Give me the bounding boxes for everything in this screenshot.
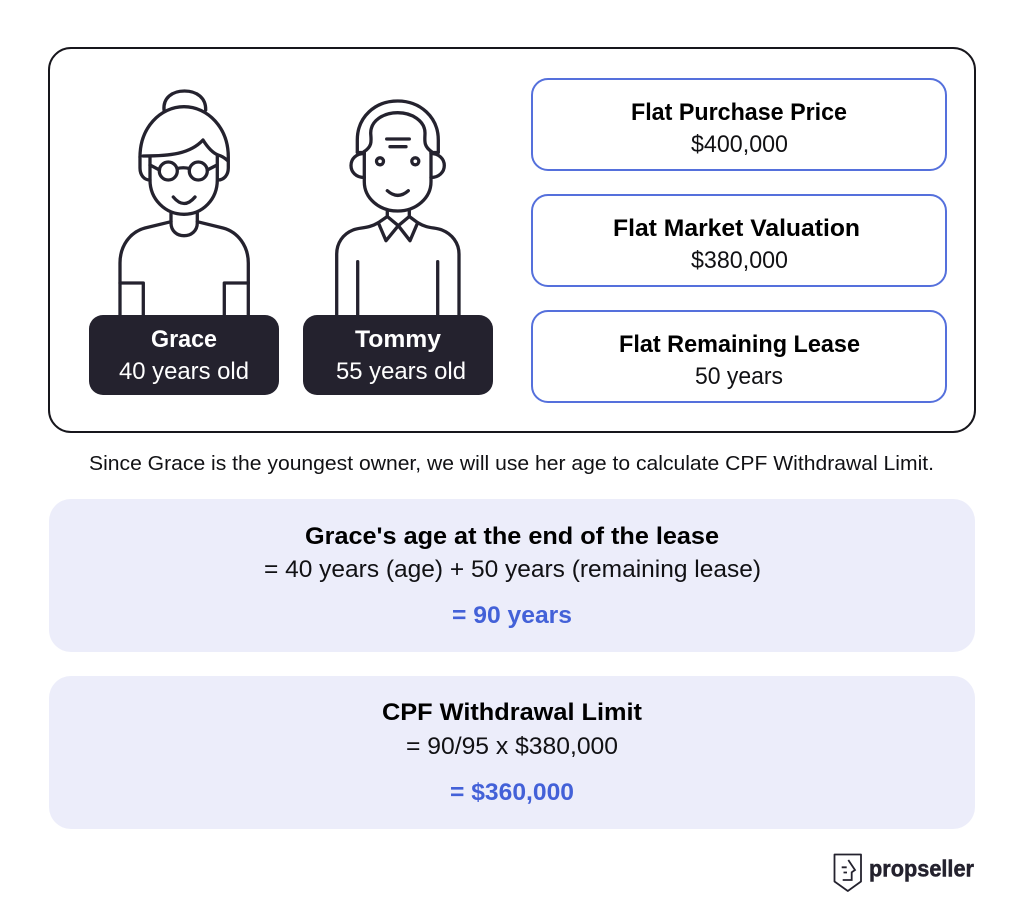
panel: age calculation: = 90 years <box>452 602 572 629</box>
panel: age calculation: = 40 years (age) + 50 years (remaining lease) <box>264 556 761 583</box>
card: flat remaining lease: Flat Remaining Lease <box>619 331 860 358</box>
panel: CPF withdrawal limit <box>49 676 975 829</box>
panel: scenario <box>49 48 975 432</box>
card: flat remaining lease <box>532 311 946 402</box>
label: Grace: 40 years old <box>119 358 249 385</box>
card: flat purchase price: $400,000 <box>691 131 788 158</box>
logo: propseller <box>834 854 974 891</box>
icon: Tommy <box>337 101 459 315</box>
card: flat purchase price <box>532 79 946 170</box>
panel: CPF withdrawal limit: = $360,000 <box>450 779 574 806</box>
panel: CPF withdrawal limit: CPF Withdrawal Limit <box>382 699 642 726</box>
card: flat market valuation: Flat Market Valuation <box>613 215 860 242</box>
panel: age calculation: Grace's age at the end of the lease <box>305 523 719 550</box>
label: Grace: Grace <box>151 326 217 353</box>
label: Tommy <box>303 315 493 395</box>
label: Grace <box>89 315 279 395</box>
card: flat remaining lease: 50 years <box>695 363 783 390</box>
card: flat market valuation <box>532 195 946 286</box>
panel: age calculation <box>49 499 975 652</box>
label: Tommy: 55 years old <box>336 358 466 385</box>
icon: Grace <box>120 91 248 315</box>
card: flat purchase price: Flat Purchase Price <box>631 99 847 126</box>
panel: CPF withdrawal limit: = 90/95 x $380,000 <box>406 733 618 760</box>
logo: propseller: propseller <box>869 856 974 882</box>
card: flat market valuation: $380,000 <box>691 247 788 274</box>
label: Tommy: Tommy <box>355 326 442 353</box>
explanatory sentence: Since Grace is the youngest owner, we will use her age to calculate CPF Withdrawal Limit. <box>89 452 934 475</box>
